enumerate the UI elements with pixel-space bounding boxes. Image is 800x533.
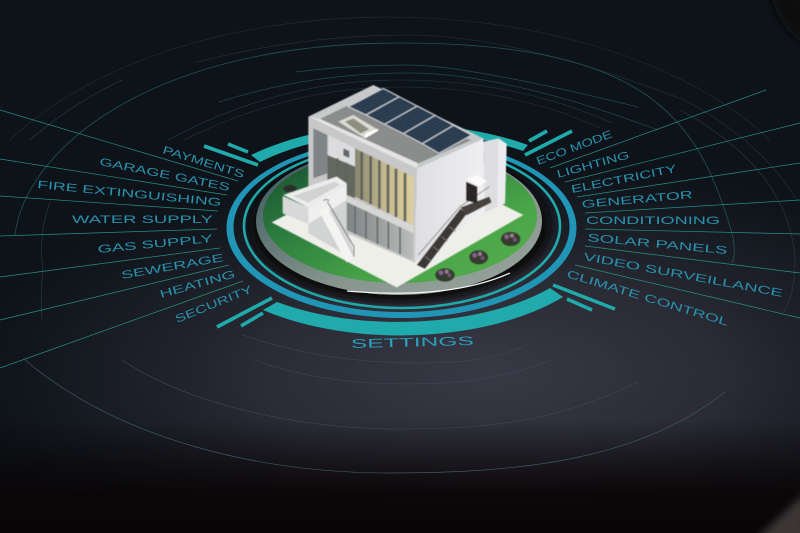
round platform <box>250 147 550 302</box>
right labels <box>535 129 784 329</box>
lit upper windows <box>355 148 413 225</box>
lower left open floor <box>308 202 355 257</box>
label: generator: GENERATOR <box>581 189 693 211</box>
front facade base <box>308 117 417 263</box>
house model <box>272 85 523 287</box>
skylight <box>338 115 378 138</box>
window mullions <box>337 152 405 221</box>
side extension <box>483 138 507 213</box>
label: climate control: CLIMATE CONTROL <box>565 268 730 329</box>
tick bars <box>204 131 615 327</box>
right wall <box>415 138 485 263</box>
lower glazing <box>347 202 413 260</box>
small window <box>343 148 349 158</box>
label: sewerage: SEWERAGE <box>120 252 225 282</box>
label: security: SECURITY <box>174 283 255 326</box>
white balcony block <box>283 177 347 224</box>
silver rim <box>347 273 510 293</box>
label: electricity: ELECTRICITY <box>570 163 678 196</box>
door <box>466 182 477 203</box>
dark recess <box>327 155 355 198</box>
label: gas supply: GAS SUPPLY <box>97 233 214 256</box>
awning <box>467 175 487 187</box>
dial: central ring system <box>204 124 615 335</box>
blue ring <box>226 138 576 318</box>
label: lighting: LIGHTING <box>556 149 631 181</box>
label: garage gates: GARAGE GATES <box>98 156 231 194</box>
floor slab <box>347 196 414 233</box>
label: eco mode: ECO MODE <box>535 129 614 168</box>
bush: middle <box>469 250 488 264</box>
bush: rear <box>501 232 520 246</box>
plaza slab <box>272 202 523 287</box>
left labels <box>37 144 255 326</box>
upper left glazing <box>313 128 327 178</box>
thick teal arc: top <box>251 124 528 162</box>
label: conditioning: CONDITIONING <box>586 215 720 227</box>
heading: settings: SETTINGS <box>351 334 474 351</box>
label: solar panels: SOLAR PANELS <box>587 232 728 257</box>
label: video surveillance: VIDEO SURVEILLANCE <box>582 251 784 300</box>
roof deck <box>320 106 472 163</box>
roof left rim shade <box>308 117 418 168</box>
label: payments: PAYMENTS <box>161 144 246 181</box>
upper left panel <box>328 135 355 167</box>
label: fire extinguishing: FIRE EXTINGUISHING <box>37 179 222 209</box>
stair rail <box>323 199 354 257</box>
bush: upper left <box>283 185 297 192</box>
solar panels <box>348 88 472 153</box>
white stairs <box>318 207 353 263</box>
thick teal arc: bottom <box>263 288 563 335</box>
dark exterior stairs <box>417 187 489 269</box>
label: heating: HEATING <box>159 268 237 301</box>
label: water supply: WATER SUPPLY <box>72 214 214 226</box>
thin teal ring <box>244 144 560 308</box>
lawn <box>263 149 537 283</box>
landing <box>461 197 492 215</box>
radial connector lines <box>0 90 800 368</box>
bush: front <box>435 268 455 282</box>
glass base <box>256 147 542 295</box>
roof rim <box>308 85 483 168</box>
